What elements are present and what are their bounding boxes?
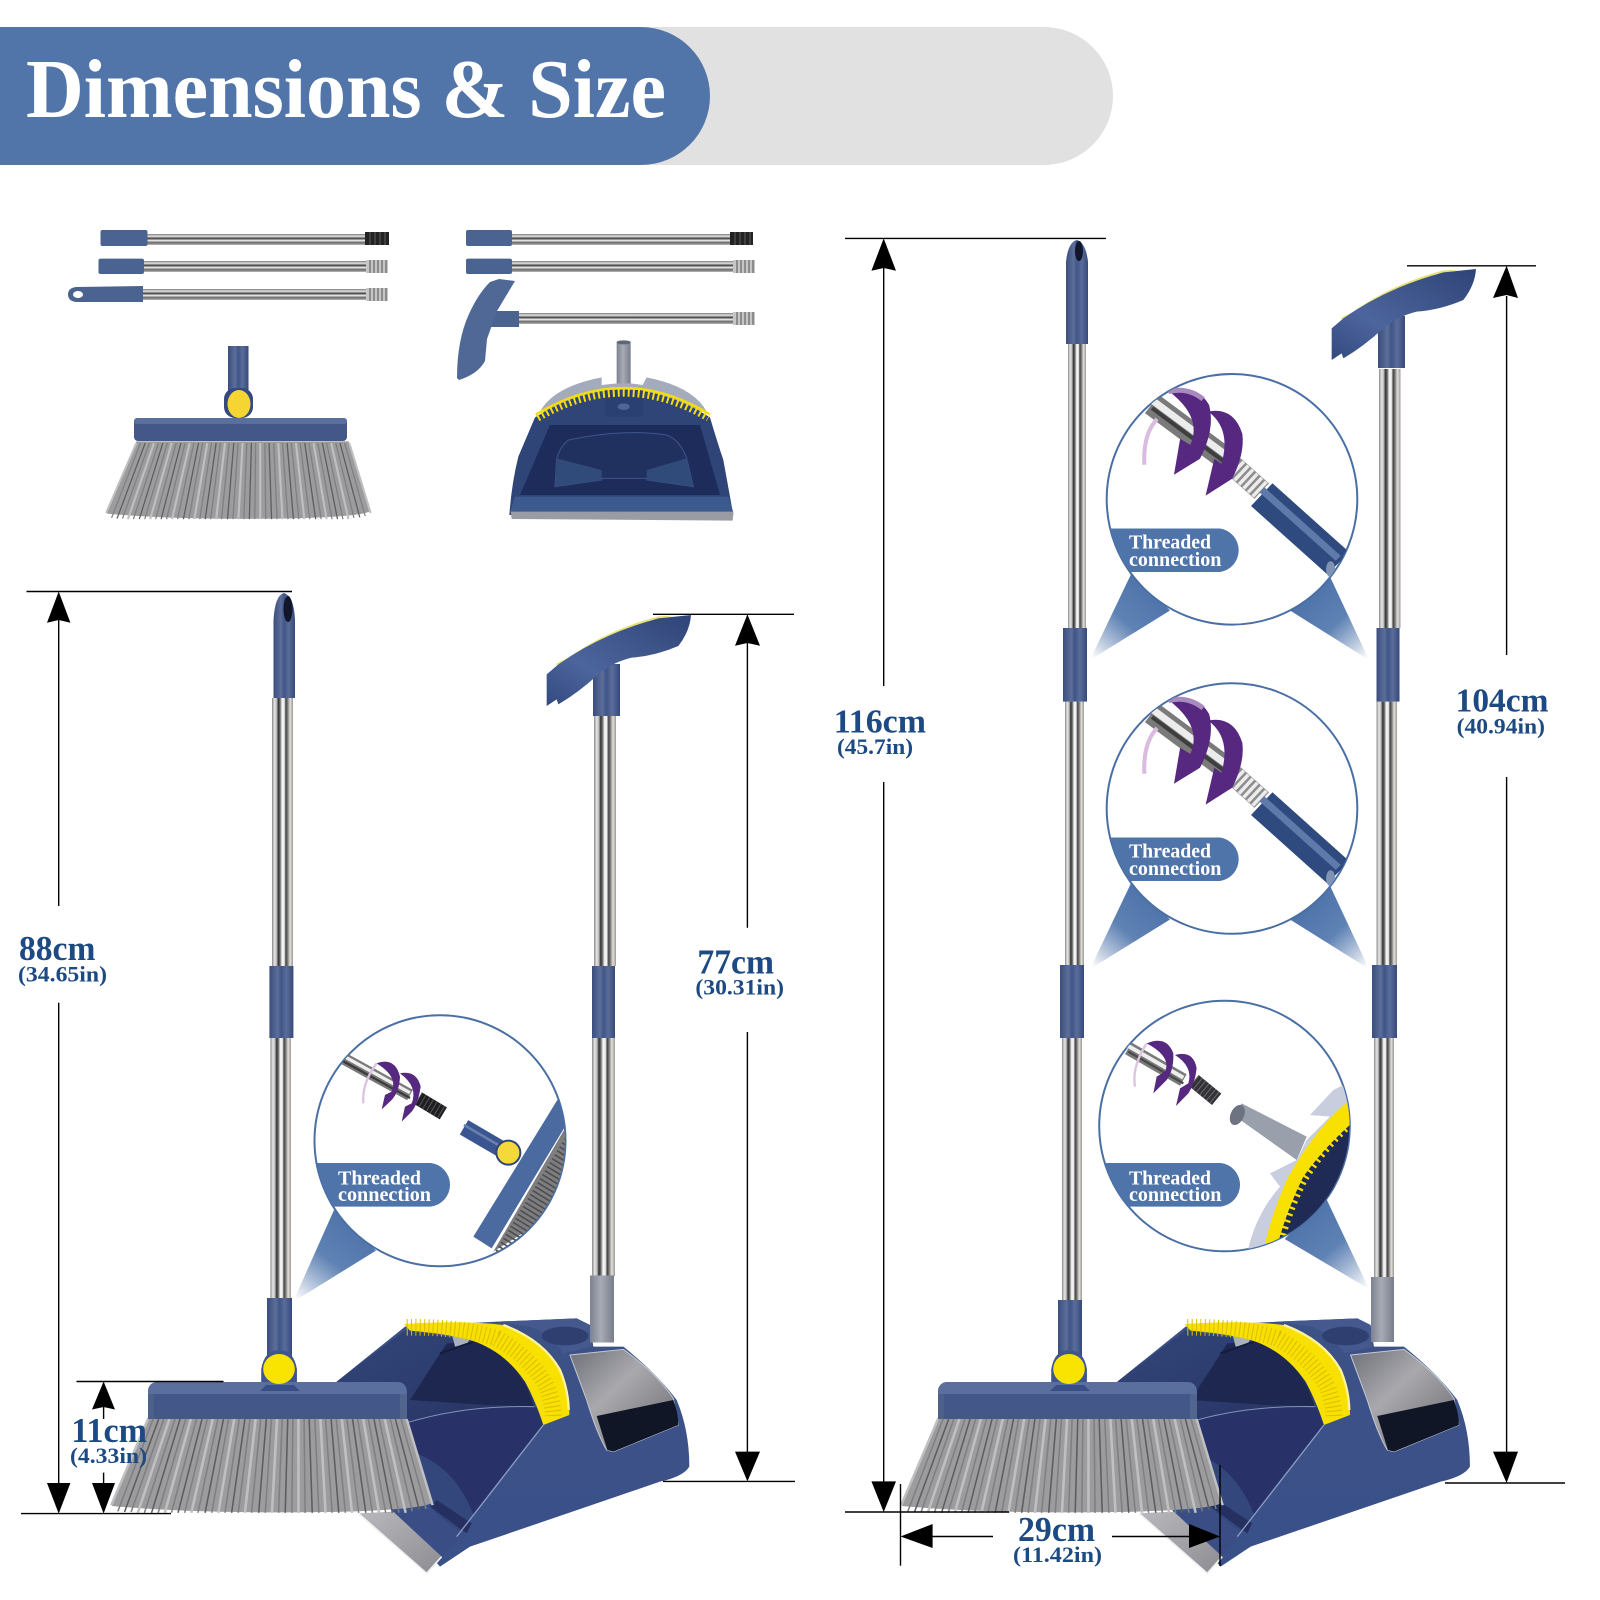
dimension: 29cm: [900, 1465, 1220, 1567]
dimension: 77cm: [653, 614, 795, 1481]
label pill: [318, 1163, 450, 1207]
dimension: 116cm: 116cm: [834, 704, 926, 740]
dimension: 11cm: (4.33in): [70, 1443, 147, 1468]
label pill: [1100, 838, 1239, 881]
parts: broom handle rods: [68, 230, 389, 302]
title: Dimensions & Size: [26, 43, 666, 136]
callout: upper threaded connection: [1090, 374, 1369, 660]
callout: lower threaded connection: [1090, 1001, 1369, 1289]
dimension: 11cm: 11cm: [71, 1411, 147, 1450]
dimension: 29cm: 29cm: [1018, 1510, 1095, 1549]
product: broom head left: [111, 1350, 433, 1513]
header background pill: [500, 27, 1113, 165]
icon: threaded rod and dustpan socket: [1128, 1041, 1357, 1253]
pole: right dustpan handle: [1332, 269, 1476, 1342]
label pill: connection: [338, 1184, 431, 1206]
dimension: 29cm: (11.42in): [1013, 1542, 1102, 1567]
dimension: 116cm: (45.7in): [837, 734, 913, 759]
callout: left threaded connection: [293, 1015, 573, 1302]
label pill: Threaded: [1129, 840, 1211, 862]
icon: threaded rod and tube: [1144, 388, 1338, 577]
pole: left broom handle: [267, 593, 295, 1360]
pole: right broom handle: [1058, 240, 1088, 1360]
dimension: 11cm: [70, 1382, 224, 1514]
title banner: [0, 27, 710, 165]
label pill: [1090, 1163, 1240, 1207]
dimension: 104cm: (40.94in): [1457, 713, 1545, 738]
label pill: connection: [1129, 549, 1221, 571]
dimension: 88cm: (34.65in): [18, 962, 107, 987]
pole: left dustpan handle: [547, 615, 691, 1342]
dimension: 104cm: 104cm: [1456, 682, 1548, 720]
product: assembled dustpan right: [1117, 1318, 1470, 1573]
label pill: connection: [1129, 858, 1221, 880]
dimension: 88cm: 88cm: [19, 929, 95, 968]
label pill: Threaded: [1129, 1168, 1211, 1190]
dimension: 104cm: [1407, 266, 1565, 1483]
label pill: Threaded: [338, 1168, 421, 1190]
label pill: [1100, 528, 1239, 572]
parts: dustpan handle rods: [457, 230, 755, 380]
dimension: 77cm: (30.31in): [695, 974, 784, 999]
icon: threaded rod and tube: [1144, 697, 1338, 886]
parts: dustpan: [509, 340, 733, 521]
product: assembled dustpan left: [337, 1318, 689, 1573]
parts: broom head: [106, 346, 371, 519]
callout: middle threaded connection: [1090, 683, 1369, 969]
dimension: 116cm: [834, 238, 1106, 1512]
product: broom head right: [901, 1350, 1223, 1513]
icon: threaded rod and broom head: [343, 1056, 573, 1260]
label pill: connection: [1129, 1184, 1221, 1206]
dimension: 88cm: [18, 592, 292, 1514]
label pill: Threaded: [1129, 531, 1211, 553]
dimension: 77cm: 77cm: [697, 942, 774, 981]
